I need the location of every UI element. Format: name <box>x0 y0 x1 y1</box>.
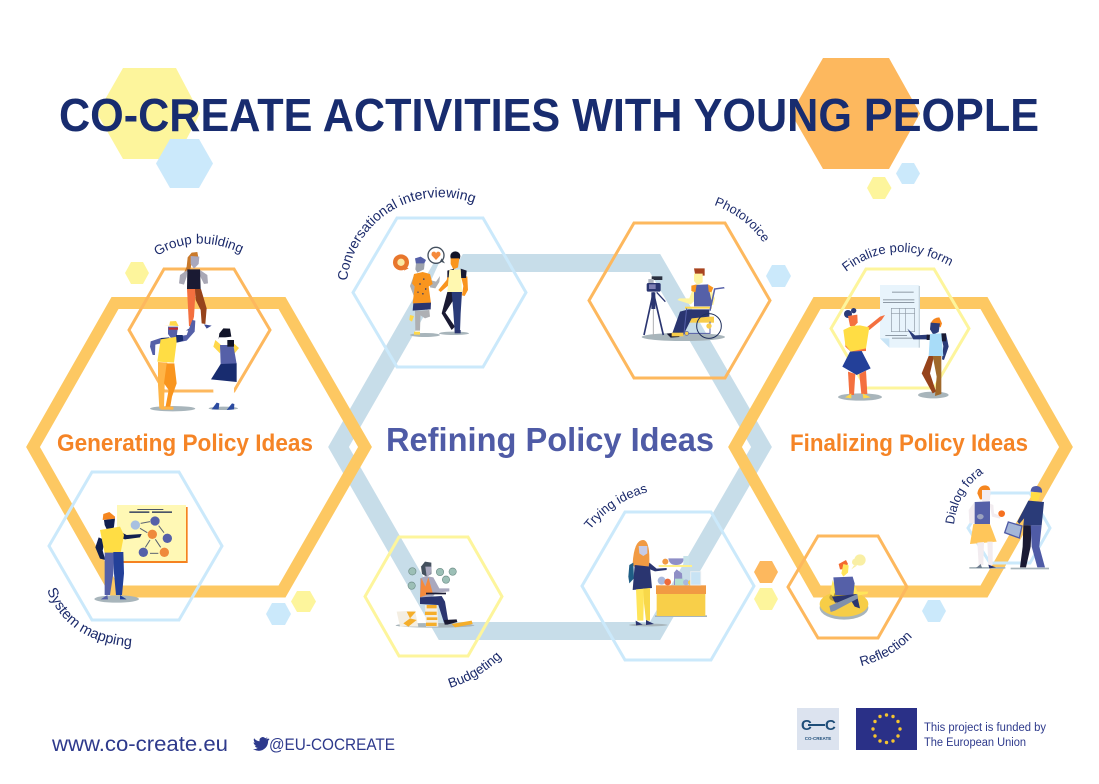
activity hexagon: photovoice <box>589 223 770 378</box>
hexagon: refining policy ideas frame <box>338 263 762 631</box>
illustration: dialog fora pair <box>969 485 1049 569</box>
illustration: conversational interviewing pair <box>393 247 469 337</box>
funding statement: The European Union <box>924 737 1026 749</box>
label: reflection: Reflection <box>860 633 912 666</box>
logo: co-create: CO-CREATE <box>805 736 831 741</box>
logo: EU flag <box>856 708 917 750</box>
decorative hexagon: large orange top right <box>791 58 920 169</box>
label: finalize policy form: Finalize policy form <box>842 242 952 272</box>
activity hexagon: dialog fora <box>968 493 1050 563</box>
illustration: group building people <box>150 252 239 411</box>
footer: website: www.co-create.eu <box>51 732 228 756</box>
small hexagon: yellow near group building <box>125 262 149 284</box>
small hexagon: yellow near system mapping <box>291 591 316 612</box>
small hexagon: blue near reflection <box>922 600 946 622</box>
decorative hexagon: large yellow top left <box>97 68 200 159</box>
heading: finalizing policy ideas: Finalizing Policy Ideas <box>790 430 1028 457</box>
illustration: finalize policy form people and document <box>838 285 949 401</box>
decorative hexagon: small yellow top right <box>867 177 892 199</box>
icon: twitter bird <box>253 737 270 751</box>
illustration: budgeting person on coins <box>396 562 474 628</box>
hexagon: finalizing policy ideas frame <box>735 303 1066 592</box>
activity hexagon: group building <box>129 269 270 391</box>
activity hexagon: reflection <box>788 536 907 638</box>
label: group building: Group building <box>154 234 244 255</box>
heading: refining policy ideas: Refining Policy Ideas <box>386 421 714 458</box>
illustration: photovoice camera and wheelchair user <box>642 268 725 341</box>
small hexagon: blue near photovoice <box>766 265 791 287</box>
halo behind conversation figures <box>424 252 464 310</box>
label: trying ideas: Trying ideas <box>583 486 647 528</box>
label: system mapping: System mapping <box>48 588 132 650</box>
hexagon: generating policy ideas frame <box>33 303 365 592</box>
illustration: system mapping presenter and board <box>94 505 188 603</box>
illustration: trying ideas woman at food stall <box>628 540 707 626</box>
footer: twitter handle: @EU-COCREATE <box>269 735 395 754</box>
decorative hexagon: light blue top left <box>156 139 213 188</box>
activity hexagon: trying ideas <box>582 512 754 660</box>
label: dialog fora: Dialog fora <box>945 468 984 524</box>
illustration: reflection person on cushion <box>820 554 868 620</box>
logo: co-create <box>797 708 839 750</box>
activity hexagon: budgeting <box>365 537 502 656</box>
small hexagon: orange near trying ideas <box>754 561 778 583</box>
logo: co-create: C <box>801 717 812 734</box>
activity hexagon: system mapping <box>49 472 222 620</box>
activity hexagon: finalize policy form <box>831 269 969 388</box>
logo: co-create: C <box>825 717 836 734</box>
funding statement: This project is funded by <box>924 722 1046 734</box>
label: budgeting: Budgeting <box>448 652 502 688</box>
heading: generating policy ideas: Generating Policy Ideas <box>57 430 313 457</box>
small hexagon: yellow near trying ideas <box>754 588 778 610</box>
title: CO-CREATE ACTIVITIES WITH YOUNG PEOPLE <box>59 89 1039 141</box>
label: photovoice: Photovoice <box>715 197 768 242</box>
small hexagon: blue near system mapping <box>266 603 291 625</box>
activity hexagon: conversational interviewing <box>353 218 526 367</box>
label: conversational interviewing: Conversational interviewing <box>338 187 476 280</box>
decorative hexagon: small blue top right <box>896 163 920 184</box>
